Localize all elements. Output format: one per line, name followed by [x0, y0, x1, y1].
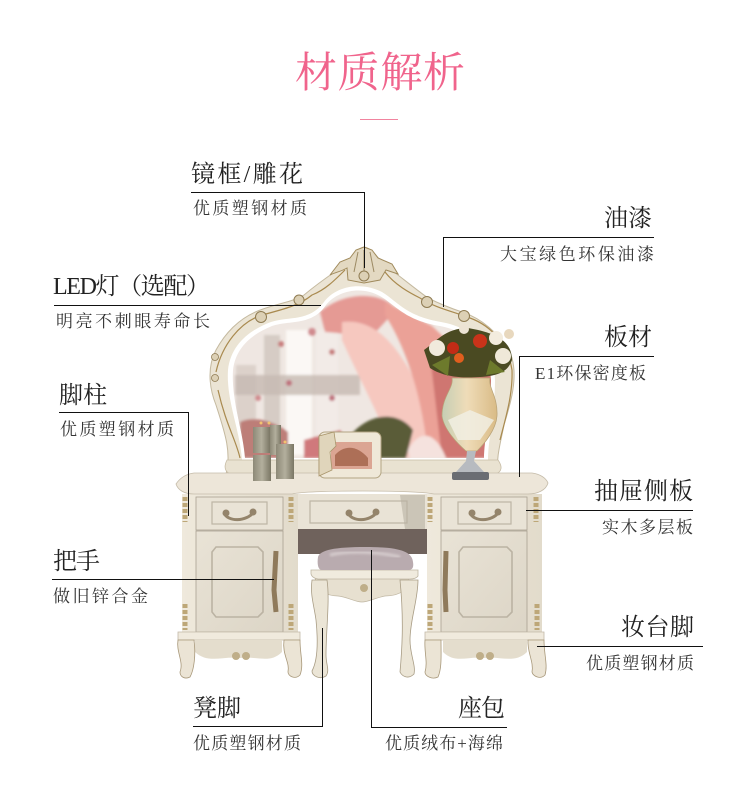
left pedestal — [178, 494, 302, 678]
callout: 把手: 做旧锌合金 — [53, 587, 148, 606]
callout: 座包: 优质绒布+海绵 — [385, 734, 503, 753]
callout: 脚柱 — [59, 382, 188, 516]
callout: 妆台脚 — [537, 614, 703, 673]
flowers — [424, 324, 514, 377]
vase — [442, 378, 497, 480]
callout: 抽屉侧板 — [526, 478, 693, 537]
photo frame — [319, 432, 381, 478]
callout: 抽屉侧板: 实木多层板 — [602, 518, 693, 537]
callout: 脚柱: 脚柱 — [59, 382, 107, 409]
callout: 镜框/雕花: 镜框/雕花 — [191, 161, 303, 188]
title: 材质解析 — [295, 51, 465, 97]
callout: 把手: 把手 — [53, 548, 100, 575]
mirror base — [225, 460, 501, 474]
furniture: dressing table with mirror and stool — [176, 247, 548, 678]
callout: 凳脚: 凳脚 — [193, 695, 241, 722]
callout: 座包 — [372, 550, 507, 753]
desk top — [176, 473, 548, 494]
callout: LED灯: LED灯（选配） — [53, 273, 210, 300]
mirror reflection — [232, 290, 491, 458]
LED light ring — [228, 286, 495, 460]
callout: LED灯 — [53, 273, 321, 331]
callout: 妆台脚: 优质塑钢材质 — [586, 654, 694, 673]
callout: 油漆: 大宝绿色环保油漆 — [500, 245, 654, 264]
callout: 油漆: 油漆 — [604, 205, 652, 232]
callout: 镜框/雕花 — [191, 161, 364, 268]
callout: 镜框/雕花: 优质塑钢材质 — [193, 199, 307, 218]
callout: 凳脚 — [193, 628, 322, 753]
mirror frame — [210, 247, 514, 474]
callout: 凳脚: 优质塑钢材质 — [193, 734, 301, 753]
right pedestal — [425, 494, 546, 678]
center drawer — [298, 494, 427, 529]
callout: 座包: 座包 — [458, 695, 505, 722]
callout: 板材 — [520, 324, 654, 477]
callout: 板材: 板材 — [604, 324, 652, 351]
callout: 板材: E1环保密度板 — [535, 364, 646, 383]
candles — [253, 422, 294, 481]
callout: 妆台脚: 妆台脚 — [621, 614, 694, 641]
callout: 把手 — [52, 548, 274, 606]
callout: LED灯: 明亮不刺眼寿命长 — [56, 312, 210, 331]
callout: 油漆 — [444, 205, 654, 307]
desk lower dark band — [297, 528, 427, 554]
stool — [311, 547, 418, 678]
title underline — [360, 119, 398, 120]
callout: 抽屉侧板: 抽屉侧板 — [594, 478, 693, 505]
callout: 脚柱: 优质塑钢材质 — [60, 420, 174, 439]
